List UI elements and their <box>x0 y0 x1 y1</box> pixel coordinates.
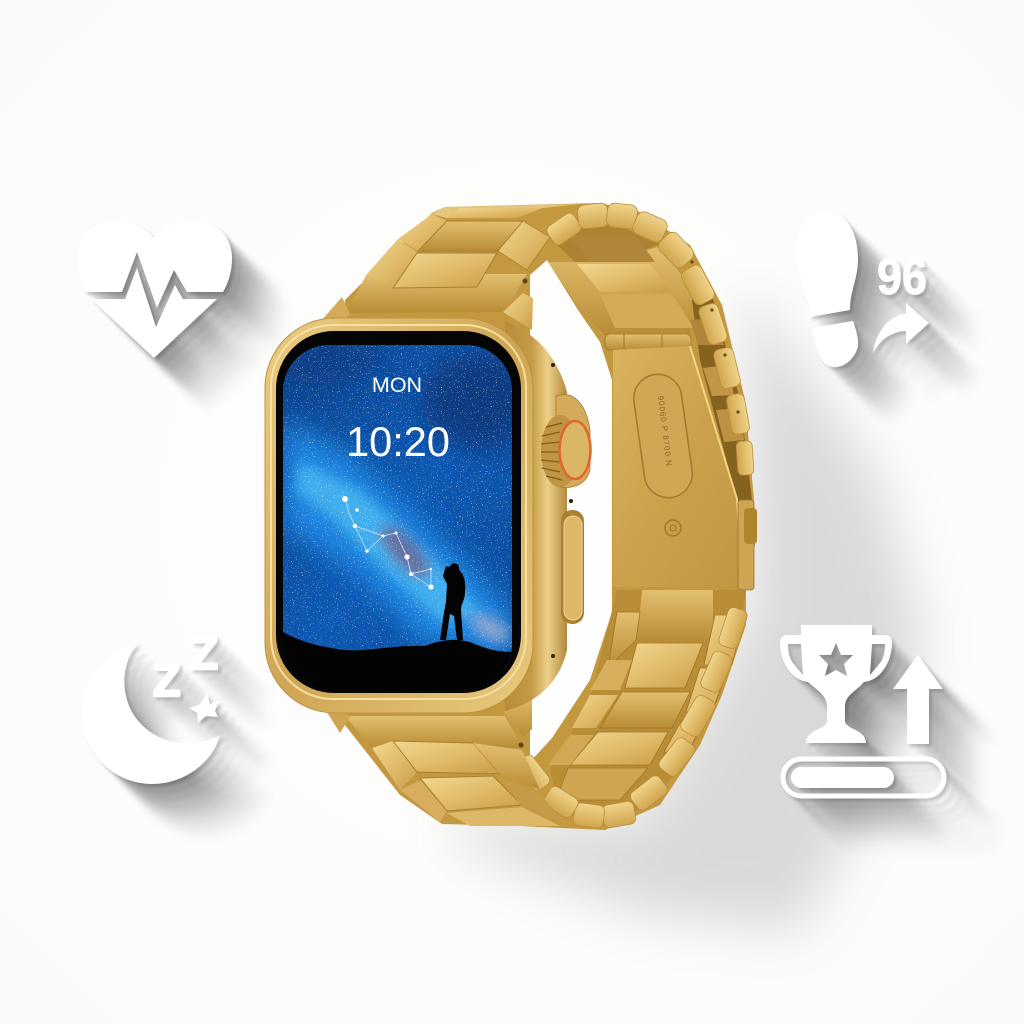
hiker silhouette <box>440 563 465 640</box>
crown housing <box>556 394 590 487</box>
night sky dark corners <box>284 345 512 461</box>
clasp side latch <box>738 500 757 590</box>
engraved oval: 90060 P 8700 N <box>656 395 674 467</box>
up arrow <box>893 655 943 744</box>
edge tiles lower <box>514 606 749 829</box>
rim highlight <box>271 325 526 699</box>
case rim <box>265 318 533 713</box>
progress bar <box>783 759 944 796</box>
letter Z small: Z <box>153 655 180 706</box>
horizon silhouette <box>283 632 512 690</box>
gold smartwatch <box>260 202 757 830</box>
microphone hole <box>569 499 573 503</box>
step count: 96 <box>877 248 927 305</box>
time: 10:20 <box>346 418 450 465</box>
milky way core <box>295 462 515 649</box>
moon <box>82 643 220 784</box>
icon: heart rate <box>78 221 232 358</box>
edge tiles upper <box>545 202 754 476</box>
watch screen <box>283 345 512 690</box>
edge tile pins <box>690 260 740 414</box>
watch cast shadow <box>440 280 925 930</box>
lower front band links <box>345 716 566 826</box>
icon: achievement <box>780 625 944 796</box>
milky way glow <box>283 420 512 660</box>
star <box>189 694 219 723</box>
lower rear band links <box>548 590 746 818</box>
shoe sole <box>796 212 858 317</box>
watch body side <box>505 321 567 711</box>
clasp hinge <box>605 334 691 350</box>
constellation <box>342 496 434 590</box>
star field <box>283 345 512 690</box>
upper front band links <box>345 204 580 313</box>
body speaker holes <box>551 363 555 658</box>
engraved oval <box>631 371 695 501</box>
clasp button <box>665 520 681 536</box>
top-right lug <box>503 293 533 330</box>
day label: MON <box>372 373 422 397</box>
bottom-right lug <box>503 692 532 737</box>
top-left lug <box>320 297 350 325</box>
fold-over clasp <box>613 346 757 590</box>
bottom-left lug <box>318 698 350 733</box>
icon: steps <box>796 212 929 367</box>
shoe heel <box>812 321 858 367</box>
black bezel <box>276 331 521 693</box>
digital crown <box>541 415 590 487</box>
curved arrow <box>873 303 929 353</box>
side button <box>561 510 584 624</box>
trophy <box>780 625 892 743</box>
icon: moon and sleep <box>82 627 220 784</box>
upper rear band links <box>548 224 752 590</box>
watch band base <box>345 203 755 830</box>
letter Z large: Z <box>190 627 218 679</box>
